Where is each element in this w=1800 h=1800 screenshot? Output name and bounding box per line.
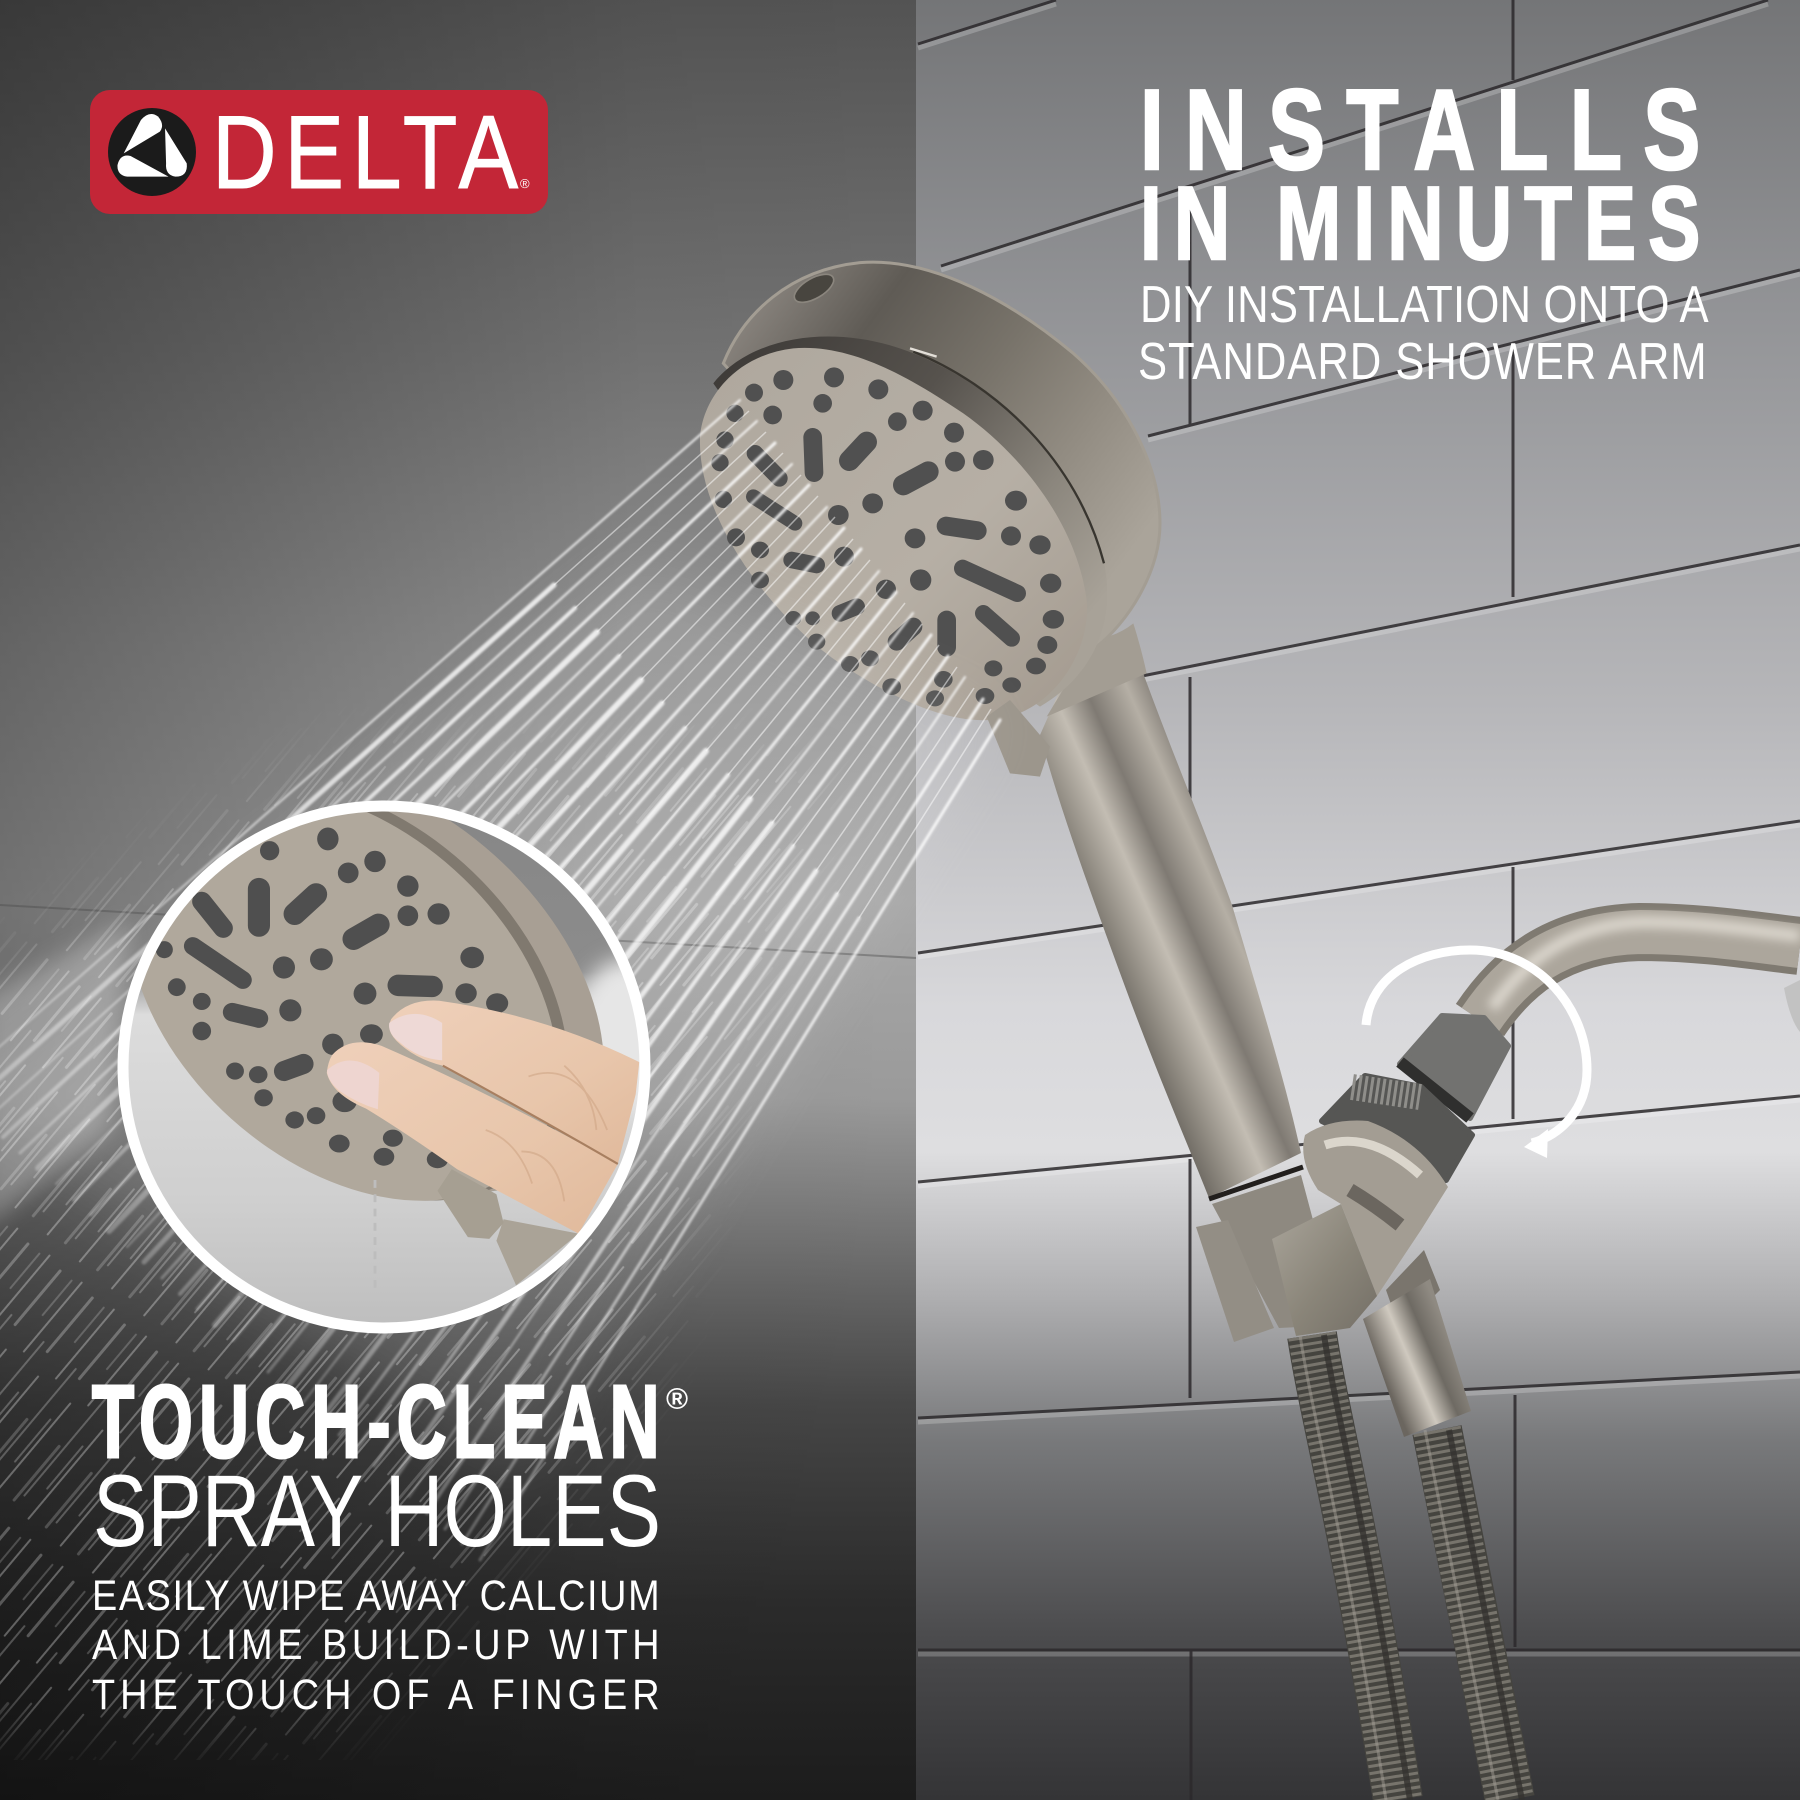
mode lever <box>987 700 1050 777</box>
flexible hoses <box>1300 1335 1522 1800</box>
logo wordmark: DELTA <box>212 94 518 211</box>
shower head <box>700 262 1160 777</box>
description line one: EASILY WIPE AWAY CALCIUM <box>92 1571 660 1620</box>
inset background <box>118 802 650 1334</box>
inset lever <box>437 1169 504 1239</box>
registered mark: ® <box>666 1383 688 1416</box>
head rim <box>713 336 1107 707</box>
inset holes <box>156 827 508 1168</box>
finger: upper <box>389 1001 639 1164</box>
inset head shell <box>388 812 603 1192</box>
spray streams <box>0 400 1000 1560</box>
inset spray face <box>141 812 552 1201</box>
hose connector <box>1363 1250 1471 1437</box>
callout: touch-clean spray holes <box>92 1364 688 1719</box>
Delta logo <box>90 90 548 214</box>
handle neck flare <box>1047 623 1147 717</box>
spray glow <box>0 560 1000 1480</box>
spray face <box>700 348 1087 720</box>
spray holes <box>711 367 1064 706</box>
knurled nut <box>1322 1076 1472 1180</box>
thin stream roots near the head <box>554 411 991 918</box>
bright far-left mist <box>0 920 130 1230</box>
fine spray texture <box>0 739 817 1760</box>
logo registered mark: ® <box>520 176 530 191</box>
inset circle: finger wiping spray holes <box>118 800 650 1334</box>
finger: lower <box>327 1042 618 1234</box>
description line two: AND LIME BUILD-UP WITH <box>92 1620 660 1669</box>
bracket front <box>1272 1204 1377 1336</box>
mode indicator <box>790 269 838 308</box>
callout: installs in minutes <box>1138 67 1709 391</box>
handset handle <box>1040 670 1341 1328</box>
description line three: THE TOUCH OF A FINGER <box>92 1670 660 1719</box>
inset white ring <box>123 806 645 1328</box>
subheading: SPRAY HOLES <box>93 1454 661 1568</box>
description line one: DIY INSTALLATION ONTO A <box>1140 277 1709 334</box>
heading line two: IN MINUTES <box>1140 166 1700 282</box>
water spray <box>0 400 1000 1760</box>
hose: bracket <box>1425 1430 1522 1800</box>
logo badge <box>90 90 548 214</box>
rotation arrow <box>1366 950 1587 1158</box>
shower arm <box>1480 922 1800 1032</box>
clip tab <box>1196 1220 1274 1342</box>
swivel body <box>1303 1121 1448 1296</box>
inset tile edge <box>374 1180 376 1274</box>
heading line one: INSTALLS <box>1140 67 1700 194</box>
left background panel <box>0 0 916 1800</box>
wall bracket <box>1196 1016 1508 1342</box>
heading: TOUCH-CLEAN <box>92 1364 659 1479</box>
head back shell <box>723 262 1160 647</box>
description line two: STANDARD SHOWER ARM <box>1138 334 1707 391</box>
inset handle <box>496 1219 579 1285</box>
hose: handset <box>1300 1335 1410 1800</box>
logo mark <box>108 108 196 196</box>
right tiled wall <box>916 0 1800 1800</box>
arm adapter nut <box>1400 1016 1508 1118</box>
